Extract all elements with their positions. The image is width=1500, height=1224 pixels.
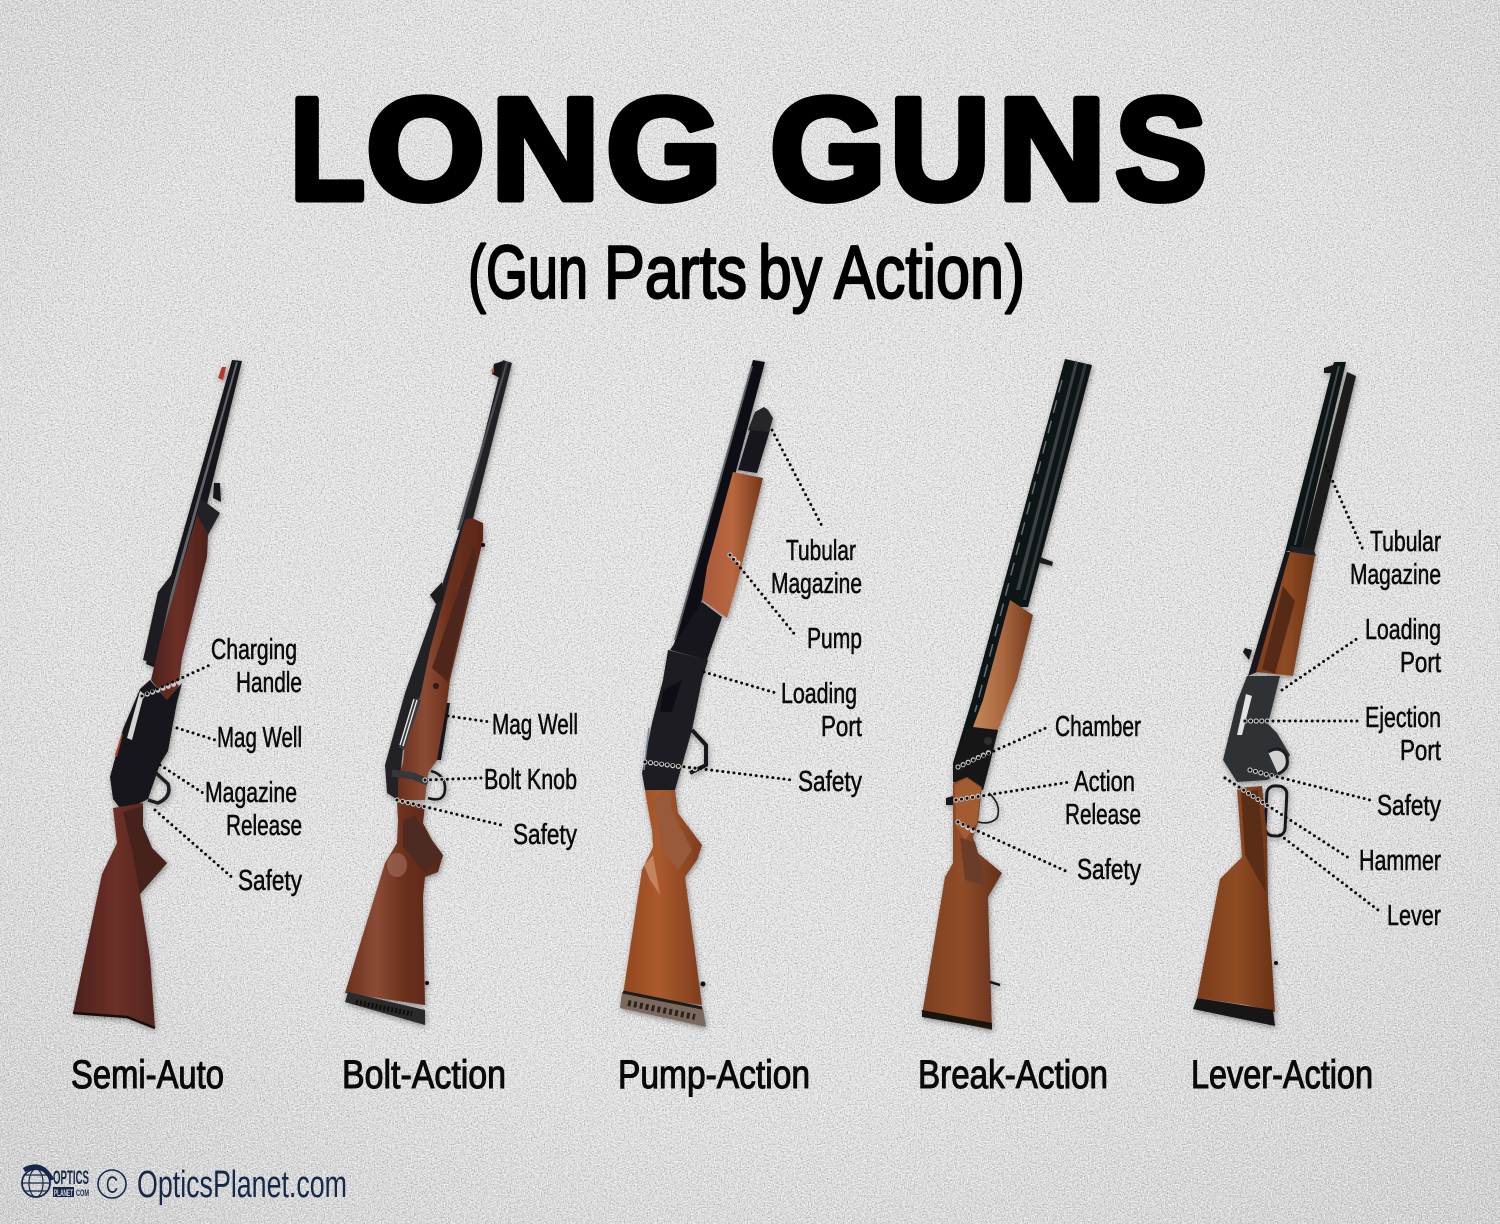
copyright and site name: C	[106, 1172, 118, 1199]
callout: Safety	[645, 762, 862, 798]
title: L	[290, 68, 365, 230]
callout: Chamber	[958, 711, 1141, 767]
callout: Hammer: Hammer	[1359, 845, 1441, 877]
callout: Loading Port: Loading	[1365, 614, 1441, 646]
callout: Loading Port: Loading	[781, 678, 857, 710]
callout: Tubular Magazine: Tubular	[786, 535, 856, 567]
callout: Safety	[397, 800, 577, 851]
subtitle: Action	[834, 230, 1004, 314]
callout: Tubular Magazine: Tubular	[1370, 526, 1441, 558]
callout: Safety	[958, 822, 1141, 886]
illustration: bolt-action rifle	[345, 360, 512, 1025]
callout: Mag Well: Mag Well	[492, 709, 578, 741]
callout: Tubular Magazine: Magazine	[1350, 559, 1441, 591]
callout: Tubular Magazine	[1326, 466, 1441, 591]
panel: break-action shotgun	[918, 359, 1141, 1097]
callout: Loading Port: Port	[1400, 647, 1441, 679]
callout: Hammer	[1225, 778, 1441, 877]
callout: Mag Well	[177, 722, 302, 754]
callout: Charging Handle: Charging	[211, 634, 297, 666]
illustration: pump-action shotgun	[620, 360, 773, 1027]
callout: Loading Port: Port	[821, 711, 862, 743]
illustration: break-action shotgun	[922, 359, 1092, 1030]
panel: semi-auto rifle	[71, 360, 302, 1097]
callout: Loading Port	[704, 672, 862, 743]
subtitle: )	[1005, 230, 1025, 314]
callout: Magazine Release: Release	[226, 810, 302, 842]
callout: Loading Port	[1282, 614, 1441, 690]
callout: Safety	[155, 810, 302, 897]
callout: Tubular Magazine	[771, 430, 862, 600]
callout: Charging Handle	[142, 634, 302, 699]
callout: Action Release: Release	[1065, 799, 1141, 831]
logo wordmark: OPTICS	[53, 1168, 89, 1189]
footer: OpticsPlanet credit	[22, 1164, 347, 1206]
title: N	[998, 68, 1106, 230]
icon: OpticsPlanet globe logo	[22, 1167, 52, 1197]
logo wordmark	[53, 1168, 89, 1198]
callout: Lever: Lever	[1387, 900, 1441, 932]
illustration: lever-action rifle	[1193, 362, 1356, 1026]
title: G	[770, 68, 886, 230]
callout: Safety: Safety	[1377, 790, 1441, 822]
subtitle: (Gun	[468, 230, 588, 314]
title: N	[491, 68, 600, 230]
title: O	[366, 68, 485, 230]
title	[290, 68, 1207, 230]
callout: Tubular Magazine: Magazine	[771, 568, 862, 600]
subtitle: by	[758, 230, 822, 314]
callout: Ejection Port	[1245, 702, 1441, 767]
subtitle: Parts	[604, 230, 747, 314]
logo wordmark: COM	[76, 1188, 89, 1198]
subtitle	[468, 230, 1025, 314]
gun name: Pump-Action: Pump-Action	[618, 1053, 810, 1097]
callout: Action Release	[956, 766, 1141, 831]
copyright and site name	[98, 1164, 347, 1206]
callout: Ejection Port: Port	[1400, 735, 1441, 767]
callout: Lever	[1280, 835, 1441, 932]
gun name: Bolt-Action: Bolt-Action	[342, 1053, 506, 1097]
callout: Magazine Release: Magazine	[205, 777, 297, 809]
callout: Safety: Safety	[238, 865, 302, 897]
callout: Safety	[1250, 770, 1441, 822]
title: U	[890, 68, 990, 230]
gun name: Lever-Action: Lever-Action	[1191, 1053, 1373, 1097]
illustration: semi-auto rifle	[73, 360, 242, 1028]
callout: Pump	[730, 555, 862, 655]
callout: Magazine Release	[160, 765, 302, 842]
gun name: Break-Action: Break-Action	[918, 1053, 1108, 1097]
logo wordmark: PLANET	[54, 1188, 73, 1198]
callout: Pump: Pump	[807, 623, 862, 655]
callout: Mag Well: Mag Well	[217, 722, 302, 754]
callout: Charging Handle: Handle	[236, 667, 302, 699]
panel: pump-action shotgun	[618, 360, 862, 1097]
callout: Action Release: Action	[1074, 766, 1135, 798]
gun name: Semi-Auto: Semi-Auto	[71, 1053, 224, 1097]
callout: Safety: Safety	[1077, 854, 1141, 886]
callout: Ejection Port: Ejection	[1365, 702, 1441, 734]
title: S	[1115, 68, 1207, 230]
callout: Chamber: Chamber	[1055, 711, 1141, 743]
callout: Bolt Knob: Bolt Knob	[484, 764, 577, 796]
panel: bolt-action rifle	[342, 360, 578, 1097]
callout: Mag Well	[448, 709, 578, 741]
copyright and site name: OpticsPlanet.com	[137, 1164, 347, 1206]
callout: Safety: Safety	[798, 766, 862, 798]
title: G	[606, 68, 722, 230]
panel: lever-action rifle	[1191, 362, 1441, 1097]
callout: Safety: Safety	[513, 819, 577, 851]
